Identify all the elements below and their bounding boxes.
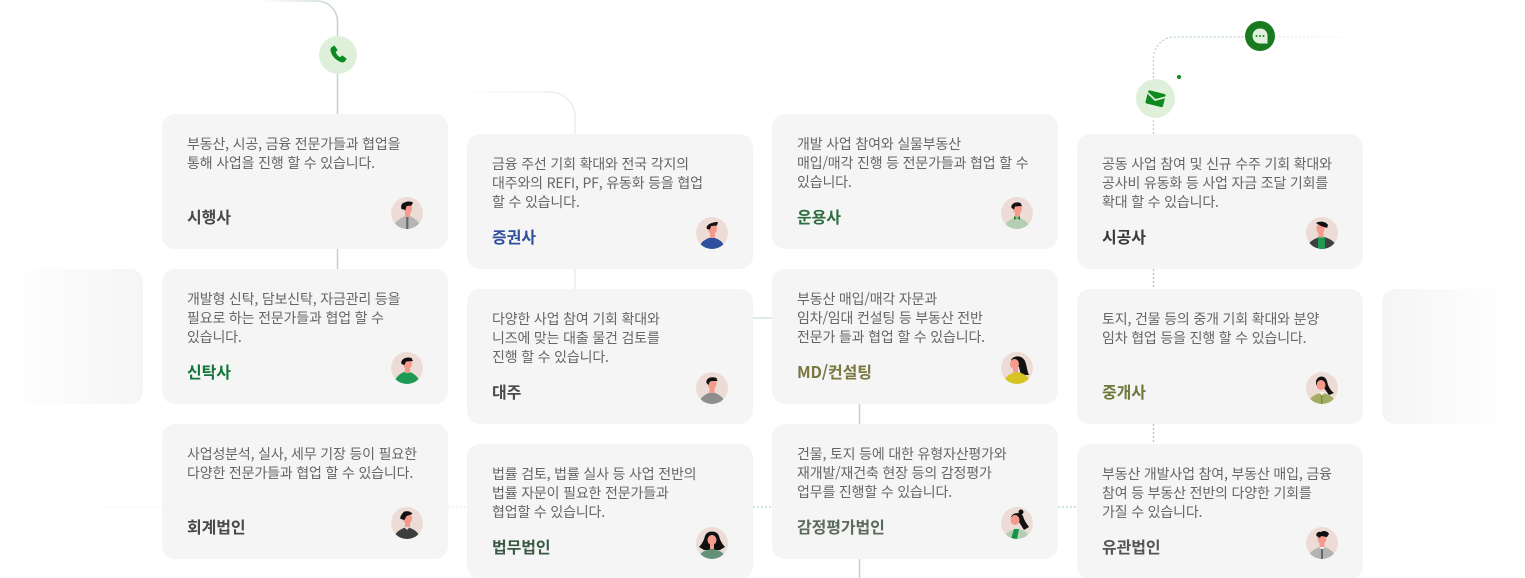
avatar: 시행사 (391, 197, 423, 229)
text: 증권사 description: 할 수 있습니다. (492, 192, 580, 212)
panel: 중개사 (1077, 289, 1363, 424)
text: 중개사 description (1102, 309, 1319, 348)
panel: MD/컨설팅 (772, 269, 1058, 404)
text: MD/컨설팅 description: 부동산 매입/매각 자문과 (797, 289, 937, 309)
text: 법무법인 description (492, 464, 696, 522)
icon: envelope (1136, 79, 1175, 118)
text: 시행사 description (187, 134, 400, 173)
text: 법무법인 description: 협업할 수 있습니다. (492, 502, 605, 522)
avatar: MD/컨설팅 (1001, 352, 1033, 384)
text: 시행사 description: 통해 사업을 진행 할 수 있습니다. (187, 153, 375, 173)
text: 회계법인 description (187, 444, 417, 483)
panel: 운용사 (772, 114, 1058, 249)
text: 유관법인 description (1102, 464, 1332, 522)
text: 신탁사 description: 필요로 하는 전문가들과 협업 할 수 (187, 308, 384, 328)
avatar: 유관법인 (1306, 527, 1338, 559)
text: 유관법인 description: 부동산 개발사업 참여, 부동산 매입, 금융 (1102, 464, 1332, 484)
icon: phone (319, 36, 357, 74)
text: MD/컨설팅 description: 전문가 들과 협업 할 수 있습니다. (797, 327, 985, 347)
text: 감정평가법인 description: 건물, 토지 등에 대한 유형자산평가와 (797, 444, 1007, 464)
text: 법무법인 description: 법률 자문이 필요한 전문가들과 (492, 483, 669, 503)
text: 중개사 description: 임차 협업 등을 진행 할 수 있습니다. (1102, 328, 1306, 348)
text: 대주 description: 다양한 사업 참여 기회 확대와 (492, 309, 660, 329)
text: 시공사 description (1102, 154, 1332, 212)
label: 운용사: 운용사 (797, 204, 841, 228)
avatar: 증권사 (696, 217, 728, 249)
icon: small green dot (1177, 75, 1181, 79)
label: 중개사: 중개사 (1102, 379, 1146, 403)
avatar: 감정평가법인 (1001, 507, 1033, 539)
panel: 시행사 (162, 114, 448, 249)
text: MD/컨설팅 description: 임차/임대 컨설팅 등 부동산 전반 (797, 308, 983, 328)
text: 중개사 description: 토지, 건물 등의 중개 기회 확대와 분양 (1102, 309, 1319, 329)
text: 증권사 description: 대주와의 REFI, PF, 유동화 등을 협업 (492, 173, 703, 193)
panel: faded right card (1382, 289, 1525, 424)
panel: 회계법인 (162, 424, 448, 559)
avatar: 운용사 (1001, 197, 1033, 229)
label: 시행사: 시행사 (187, 204, 231, 228)
icon: chat bubble (1245, 21, 1275, 51)
text: 신탁사 description (187, 289, 400, 347)
text: 운용사 description: 개발 사업 참여와 실물부동산 (797, 134, 961, 154)
panel: 법무법인 (467, 444, 753, 578)
text: 감정평가법인 description (797, 444, 1007, 502)
text: 대주 description: 진행 할 수 있습니다. (492, 347, 609, 367)
text: 운용사 description: 매입/매각 진행 등 전문가들과 협업 할 수 (797, 153, 1028, 173)
text: 신탁사 description: 있습니다. (187, 327, 242, 347)
text: 유관법인 description: 가질 수 있습니다. (1102, 502, 1202, 522)
label: 대주: 대주 (492, 379, 521, 403)
label: 신탁사: 신탁사 (187, 359, 231, 383)
text: 감정평가법인 description: 업무를 진행할 수 있습니다. (797, 482, 952, 502)
text: 시행사 description: 부동산, 시공, 금융 전문가들과 협업을 (187, 134, 400, 154)
label: 회계법인: 회계법인 (187, 514, 245, 538)
panel: 대주 (467, 289, 753, 424)
panel: 시공사 (1077, 134, 1363, 269)
panel: 증권사 (467, 134, 753, 269)
panel: 신탁사 (162, 269, 448, 404)
avatar: 신탁사 (391, 352, 423, 384)
label: 시공사: 시공사 (1102, 224, 1146, 248)
text: 회계법인 description: 다양한 전문가들과 협업 할 수 있습니다. (187, 463, 413, 483)
text: 대주 description (492, 309, 660, 367)
label: MD/컨설팅: MD/컨설팅 (797, 359, 872, 383)
text: 증권사 description: 금융 주선 기회 확대와 전국 각지의 (492, 154, 689, 174)
text: 운용사 description: 있습니다. (797, 172, 852, 192)
text: 유관법인 description: 참여 등 부동산 전반의 다양한 기회를 (1102, 483, 1312, 503)
panel: 감정평가법인 (772, 424, 1058, 559)
label: 감정평가법인: 감정평가법인 (797, 514, 885, 538)
avatar: 대주 (696, 372, 728, 404)
text: 운용사 description (797, 134, 1028, 192)
label: 법무법인: 법무법인 (492, 534, 550, 558)
label: 증권사: 증권사 (492, 224, 536, 248)
text: 법무법인 description: 법률 검토, 법률 실사 등 사업 전반의 (492, 464, 696, 484)
text: 시공사 description: 공사비 유동화 등 사업 자금 조달 기회를 (1102, 173, 1328, 193)
panel: 유관법인 (1077, 444, 1363, 578)
text: 대주 description: 니즈에 맞는 대출 물건 검토를 (492, 328, 660, 348)
text: 감정평가법인 description: 재개발/재건축 현장 등의 감정평가 (797, 463, 992, 483)
text: 신탁사 description: 개발형 신탁, 담보신탁, 자금관리 등을 (187, 289, 400, 309)
text: 회계법인 description: 사업성분석, 실사, 세무 기장 등이 필요한 (187, 444, 417, 464)
panel: faded left card (0, 269, 143, 404)
label: 유관법인: 유관법인 (1102, 534, 1160, 558)
avatar: 회계법인 (391, 507, 423, 539)
avatar: 시공사 (1306, 217, 1338, 249)
text: 시공사 description: 공동 사업 참여 및 신규 수주 기회 확대와 (1102, 154, 1332, 174)
avatar: 중개사 (1306, 372, 1338, 404)
text: 시공사 description: 확대 할 수 있습니다. (1102, 192, 1219, 212)
avatar: 법무법인 (696, 527, 728, 559)
text: MD/컨설팅 description (797, 289, 985, 347)
text: 증권사 description (492, 154, 703, 212)
